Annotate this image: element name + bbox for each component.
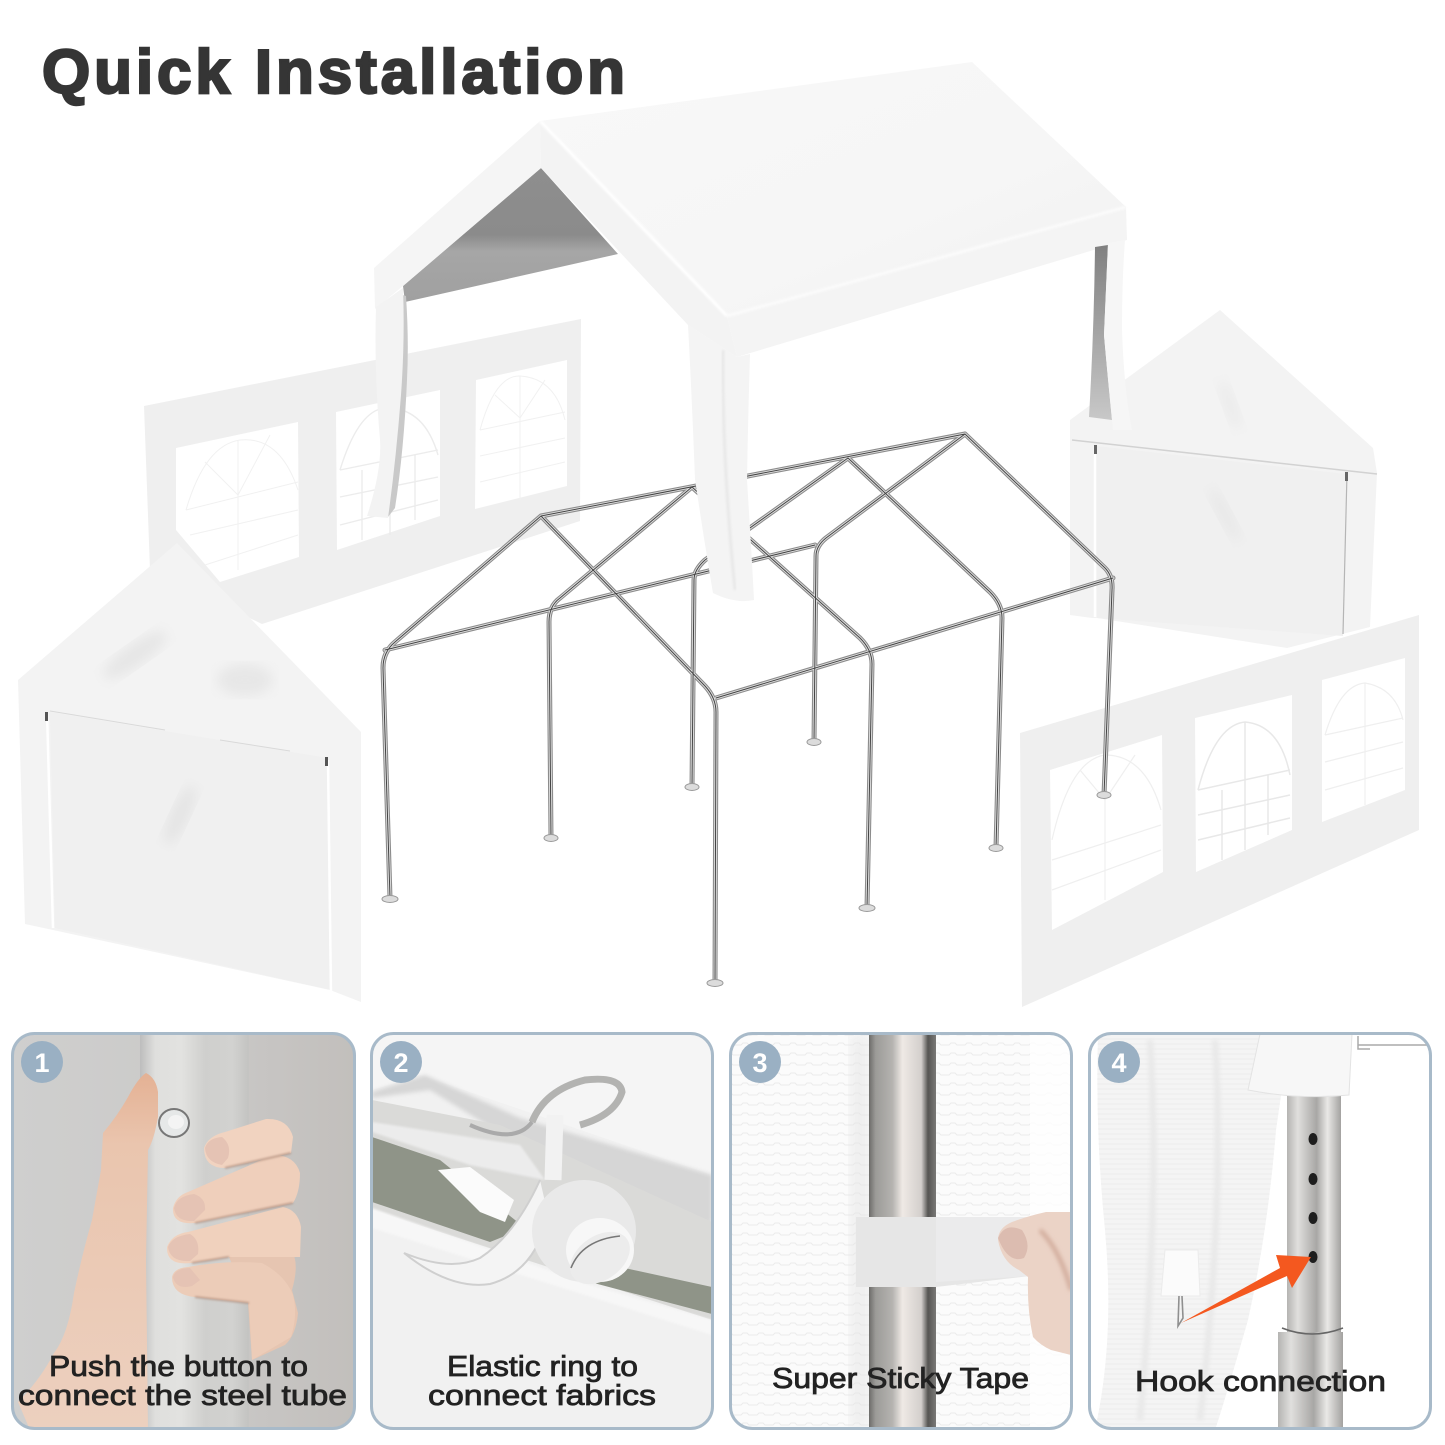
hand back: [229, 1250, 298, 1360]
left end wall with door: [18, 543, 361, 1002]
front roof band: [540, 121, 737, 357]
finger 1: [204, 1119, 293, 1168]
step 1 badge: [21, 1041, 63, 1083]
step 3 badge: [739, 1041, 781, 1083]
step 1 caption: Push the button to: [49, 1351, 308, 1383]
step 2 badge: 2: [393, 1048, 409, 1078]
mesh fabric: [732, 1035, 1030, 1426]
front right side wall with windows: [1020, 615, 1419, 1007]
back left side wall with windows: [144, 319, 581, 624]
step 3 card: [730, 1034, 1072, 1428]
ring hook: [404, 1079, 622, 1285]
finger 2: [173, 1155, 300, 1223]
step 1 caption: [18, 1351, 347, 1412]
thumb and palm: [18, 1073, 158, 1430]
right drape: [1089, 240, 1132, 430]
finger 3: [167, 1207, 301, 1263]
frame foot plates: [382, 738, 1111, 986]
step 2 caption: Elastic ring to: [447, 1351, 638, 1383]
frame bracket: [1358, 1036, 1430, 1049]
adhesive tape: [856, 1217, 1030, 1287]
step 3 badge: 3: [752, 1048, 768, 1078]
finger nails: [168, 1137, 229, 1287]
step 1 badge: 1: [34, 1048, 50, 1078]
upper tube: [1287, 1090, 1341, 1332]
centre drape: [688, 325, 754, 601]
finger 4: [172, 1262, 252, 1360]
canopy sleeve: [1248, 1034, 1352, 1097]
roof top panel: [540, 62, 1126, 316]
right roof band: [727, 207, 1127, 357]
step 1 caption: connect the steel tube: [18, 1380, 347, 1412]
left roof band: [374, 121, 541, 309]
orange arrow: [1181, 1255, 1311, 1323]
finger creases: [192, 1153, 293, 1303]
title: Quick Installation: [42, 38, 625, 107]
steel frame: [382, 434, 1113, 986]
steel tube: [372, 1100, 712, 1320]
curtain fabric: [1095, 1034, 1290, 1430]
step 2 caption: connect fabrics: [428, 1380, 656, 1412]
tube button: [159, 1109, 189, 1137]
upper fabric shade: [372, 1034, 712, 1175]
left drape: [367, 288, 408, 518]
elastic ball: [532, 1180, 636, 1284]
tube holes: [1308, 1133, 1318, 1263]
step 3 caption: Super Sticky Tape: [772, 1363, 1029, 1395]
step 1 card: [12, 1034, 354, 1430]
step 2 card: [372, 1034, 712, 1428]
canopy roof with drapes: [367, 62, 1132, 601]
fingers holding tape: [998, 1212, 1071, 1355]
step 4 caption: Hook connection: [1135, 1366, 1386, 1398]
roof underside: [403, 168, 618, 302]
steel tube: [869, 1034, 936, 1428]
steel tube: [140, 1035, 236, 1427]
step 4 badge: 4: [1111, 1048, 1127, 1078]
step 2 caption: [428, 1351, 656, 1412]
step 2 badge: [380, 1041, 422, 1083]
step 4 badge: [1098, 1041, 1140, 1083]
right end wall with door: [1070, 310, 1377, 648]
step 4 card: [1090, 1034, 1430, 1430]
metal hook: [1178, 1296, 1183, 1326]
hook tab: [1161, 1250, 1200, 1296]
lower tube: [1278, 1332, 1343, 1430]
